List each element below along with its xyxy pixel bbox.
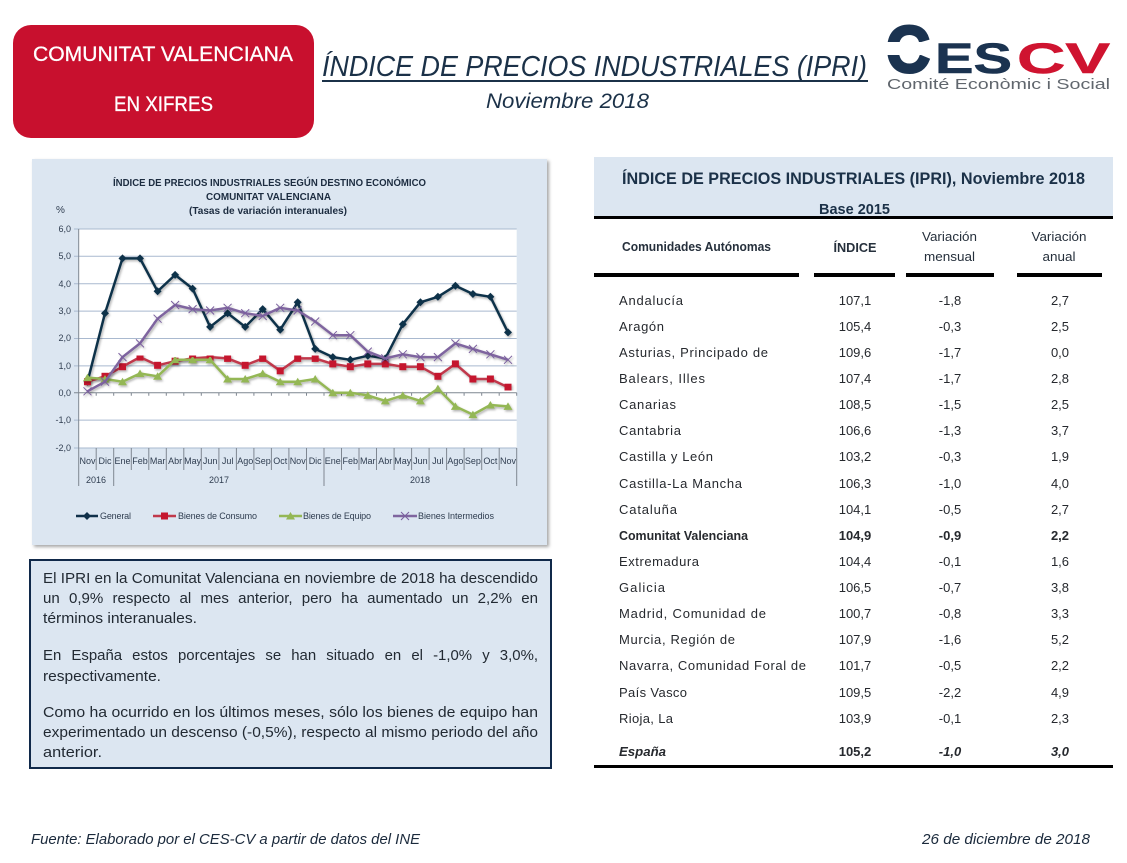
table: monthly variation column: -1,3 [939, 423, 961, 438]
y axis labels [55, 224, 71, 453]
table: index column: 104,9 [839, 528, 871, 543]
x axis labels: Abr [168, 456, 182, 466]
table: region names: Galicia [619, 580, 666, 595]
x axis labels: May [394, 456, 412, 466]
chart legend: Bienes Intermedios [418, 511, 494, 521]
table: index column: 107,9 [839, 632, 871, 647]
table: region names: Canarias [619, 397, 676, 412]
x axis labels: Feb [343, 456, 358, 466]
panel: line chart [32, 159, 547, 545]
x axis labels: Nov [79, 456, 96, 466]
table: index column: 100,7 [839, 606, 871, 621]
table: monthly variation column: -1,7 [939, 371, 961, 386]
paragraph 3: Como ha ocurrido en los últimos meses, sólo los bienes de equipo han [43, 704, 538, 721]
x axis labels: 2016 [86, 475, 106, 485]
table: monthly variation column: -2,2 [939, 685, 961, 700]
main title: ÍNDICE DE PRECIOS INDUSTRIALES (IPRI) [322, 50, 867, 83]
table: region names: Asturias, Principado de [619, 345, 768, 360]
table: index column: 106,3 [839, 476, 871, 491]
table: index column: 107,4 [839, 371, 871, 386]
table: monthly variation column: -0,9 [939, 528, 961, 543]
header badge: Comunitat Valenciana en xifres: EN XIFRES [114, 93, 213, 116]
table: index column: 105,2 [839, 744, 871, 759]
x axis labels: Jul [222, 456, 233, 466]
footer: source: Fuente: Elaborado por el CES-CV a partir de datos del INE [31, 831, 421, 848]
table: annual variation column: 3,0 [1051, 744, 1070, 759]
footer: date: 26 de diciembre de 2018 [921, 831, 1091, 848]
x axis labels: Mar [150, 456, 165, 466]
y axis labels: -2,0 [55, 443, 71, 453]
x axis labels: Dic [98, 456, 112, 466]
table: index column: 109,5 [839, 685, 871, 700]
paragraph 1: El IPRI en la Comunitat Valenciana en noviembre de 2018 ha descendido [43, 570, 538, 587]
series: General [88, 258, 508, 382]
table: region names: Madrid, Comunidad de [619, 606, 766, 621]
paragraph 2: respectivamente. [43, 668, 161, 685]
table: monthly variation column: -0,1 [939, 711, 961, 726]
table: annual variation column [1051, 293, 1070, 759]
x axis labels: Ene [325, 456, 341, 466]
table: region names: Balears, Illes [619, 371, 706, 386]
table: index column: 104,1 [839, 502, 871, 517]
chart title: COMUNITAT VALENCIANA [206, 192, 331, 203]
table: annual variation column: 2,5 [1051, 397, 1069, 412]
x axis labels: 2018 [410, 475, 430, 485]
table: monthly variation column: -0,3 [939, 319, 961, 334]
plot area [79, 229, 517, 448]
x axis labels: 2017 [209, 475, 229, 485]
table: index column: 109,6 [839, 345, 871, 360]
x axis labels: Nov [500, 456, 516, 466]
header badge: Comunitat Valenciana en xifres: COMUNITAT VALENCIANA [33, 43, 293, 66]
table: index column: 103,9 [839, 711, 871, 726]
chart title: (Tasas de variación interanuales) [189, 206, 347, 217]
table: region names [619, 293, 806, 759]
table: region names: Aragón [619, 319, 664, 334]
table: index column: 106,5 [839, 580, 871, 595]
table column headers: Variación [922, 229, 977, 244]
table column headers: ÍNDICE [834, 240, 877, 255]
table column headers: Variación [1032, 229, 1086, 244]
table: annual variation column: 4,0 [1051, 476, 1069, 491]
table heading band: ÍNDICE DE PRECIOS INDUSTRIALES (IPRI), Noviembre 2018 [622, 169, 1085, 188]
x axis labels: Jun [203, 456, 217, 466]
series: Bienes Intermedios [88, 305, 508, 391]
table: index column [839, 293, 871, 759]
table: annual variation column: 2,8 [1051, 371, 1069, 386]
table bottom rule [594, 765, 1113, 768]
y axis labels: 2,0 [58, 333, 71, 343]
paragraph 2 [43, 647, 538, 685]
table column headers: Comunidades Autónomas [622, 239, 771, 254]
x axis labels: Ene [114, 456, 131, 466]
table: region names: Murcia, Región de [619, 632, 735, 647]
table: monthly variation column [939, 293, 962, 759]
y axis labels: 0,0 [58, 388, 71, 398]
table: monthly variation column: -1,8 [939, 293, 961, 308]
x axis labels: Nov [290, 456, 306, 466]
table: annual variation column: 2,7 [1051, 502, 1069, 517]
table: region names: Comunitat Valenciana [619, 528, 749, 543]
x axis labels: Oct [273, 456, 288, 466]
chart legend: Bienes de Consumo [178, 511, 257, 521]
chart legend: Bienes de Equipo [303, 511, 371, 521]
paragraph 3 [43, 704, 538, 761]
y axis labels: -1,0 [55, 415, 71, 425]
table: index column: 107,1 [839, 293, 871, 308]
table: monthly variation column: -0,5 [939, 502, 961, 517]
table: annual variation column: 1,9 [1051, 449, 1069, 464]
logo: CES-CV: CV [1017, 35, 1110, 83]
table: region names: Cantabria [619, 423, 682, 438]
subtitle: date: Noviembre 2018 [486, 90, 649, 113]
paragraph 3: experimentado un descenso (-0,5%), respecto al mismo periodo del año [43, 724, 538, 741]
table: annual variation column: 2,2 [1051, 658, 1069, 673]
table heading band [594, 157, 1113, 219]
chart legend: General [100, 511, 131, 521]
table: monthly variation column: -0,3 [939, 449, 961, 464]
table: region names: Castilla y León [619, 449, 713, 464]
table: index column: 103,2 [839, 449, 871, 464]
y axis labels: 5,0 [58, 251, 71, 261]
x axis labels: Ago [237, 456, 253, 466]
table heading band: Base 2015 [819, 201, 890, 218]
logo: CES-CV [888, 24, 1110, 89]
table: index column: 104,4 [839, 554, 871, 569]
series: Bienes de Equipo [88, 360, 508, 415]
table: monthly variation column: -1,0 [939, 476, 961, 491]
x axis labels [79, 456, 516, 485]
table: annual variation column: 2,5 [1051, 319, 1069, 334]
y axis labels: 6,0 [58, 224, 71, 234]
table: index column: 108,5 [839, 397, 871, 412]
table: region names: Navarra, Comunidad Foral de [619, 658, 806, 673]
paragraph 1: términos interanuales. [43, 610, 197, 627]
chart title [113, 176, 426, 217]
table: index column: 101,7 [839, 658, 871, 673]
table: annual variation column: 3,8 [1051, 580, 1069, 595]
table: region names: Castilla-La Mancha [619, 476, 743, 491]
table: annual variation column: 2,3 [1051, 711, 1069, 726]
chart title: ÍNDICE DE PRECIOS INDUSTRIALES SEGÚN DESTINO ECONÓMICO [113, 176, 426, 189]
x axis labels: Feb [132, 456, 148, 466]
x axis labels: Oct [483, 456, 498, 466]
table column headers: anual [1042, 249, 1076, 264]
x axis labels: Jun [413, 456, 428, 466]
table column headers: mensual [924, 249, 975, 264]
table: region names: Cataluña [619, 502, 678, 517]
paragraph 1 [43, 570, 538, 627]
table: index column: 105,4 [839, 319, 871, 334]
table column headers [594, 229, 1102, 277]
y axis labels: 4,0 [58, 279, 71, 289]
y axis unit: % [56, 205, 65, 216]
table: monthly variation column: -0,8 [939, 606, 961, 621]
chart legend [76, 511, 494, 521]
x axis labels: Ago [447, 456, 463, 466]
table: annual variation column: 2,7 [1051, 293, 1069, 308]
table: index column: 106,6 [839, 423, 871, 438]
x axis labels: Mar [360, 456, 376, 466]
x axis labels: Dic [309, 456, 322, 466]
header badge: Comunitat Valenciana en xifres [13, 25, 314, 138]
table: annual variation column: 3,3 [1051, 606, 1069, 621]
x axis labels: Abr [378, 456, 392, 466]
table: monthly variation column: -0,5 [939, 658, 961, 673]
y axis labels: 3,0 [58, 306, 71, 316]
table: annual variation column: 1,6 [1051, 554, 1069, 569]
table: region names: Rioja, La [619, 711, 674, 726]
table: monthly variation column: -1,6 [939, 632, 961, 647]
paragraph 1: un 0,9% respecto al mes anterior, pero ha aumentado un 2,2% en [43, 590, 538, 607]
x axis labels: Sep [465, 456, 481, 466]
table: annual variation column: 5,2 [1051, 632, 1069, 647]
table: monthly variation column: -1,5 [939, 397, 961, 412]
logo: CES-CV: C [886, 12, 930, 86]
table: region names: País Vasco [619, 685, 687, 700]
logo: CES-CV: ES [935, 35, 1012, 83]
table: monthly variation column: -1,7 [939, 345, 961, 360]
y axis labels: 1,0 [58, 361, 71, 371]
series: Bienes de Consumo [88, 357, 508, 387]
table: annual variation column: 2,2 [1051, 528, 1069, 543]
logo: CES-CV: Comité Econòmic i Social [887, 76, 1110, 93]
text panel: commentary [30, 560, 551, 768]
x axis labels: May [184, 456, 202, 466]
table: monthly variation column: -0,1 [939, 554, 961, 569]
table: annual variation column: 4,9 [1051, 685, 1069, 700]
x axis labels: Jul [432, 456, 444, 466]
x axis labels: Sep [255, 456, 271, 466]
table: monthly variation column: -1,0 [939, 744, 962, 759]
table: monthly variation column: -0,7 [939, 580, 961, 595]
paragraph 2: En España estos porcentajes se han situado en el -1,0% y 3,0%, [43, 647, 538, 664]
table: region names: Andalucía [619, 293, 684, 308]
paragraph 3: anterior. [43, 744, 102, 761]
table: annual variation column: 0,0 [1051, 345, 1069, 360]
table: region names: España [619, 744, 666, 759]
table: annual variation column: 3,7 [1051, 423, 1069, 438]
table: region names: Extremadura [619, 554, 700, 569]
